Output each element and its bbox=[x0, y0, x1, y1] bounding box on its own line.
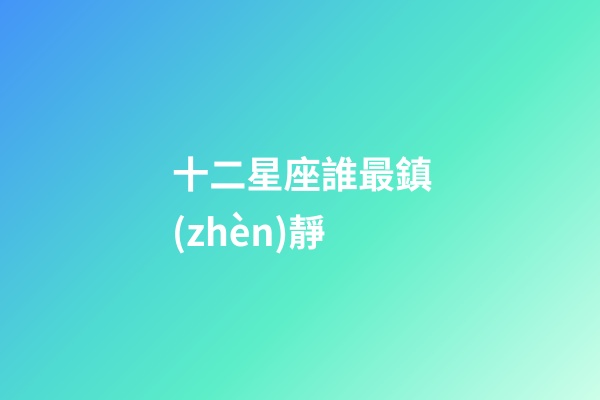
title bbox=[172, 145, 432, 257]
title: (zhèn)靜 bbox=[172, 203, 326, 257]
title: 十二星座誰最鎮 bbox=[172, 145, 432, 199]
